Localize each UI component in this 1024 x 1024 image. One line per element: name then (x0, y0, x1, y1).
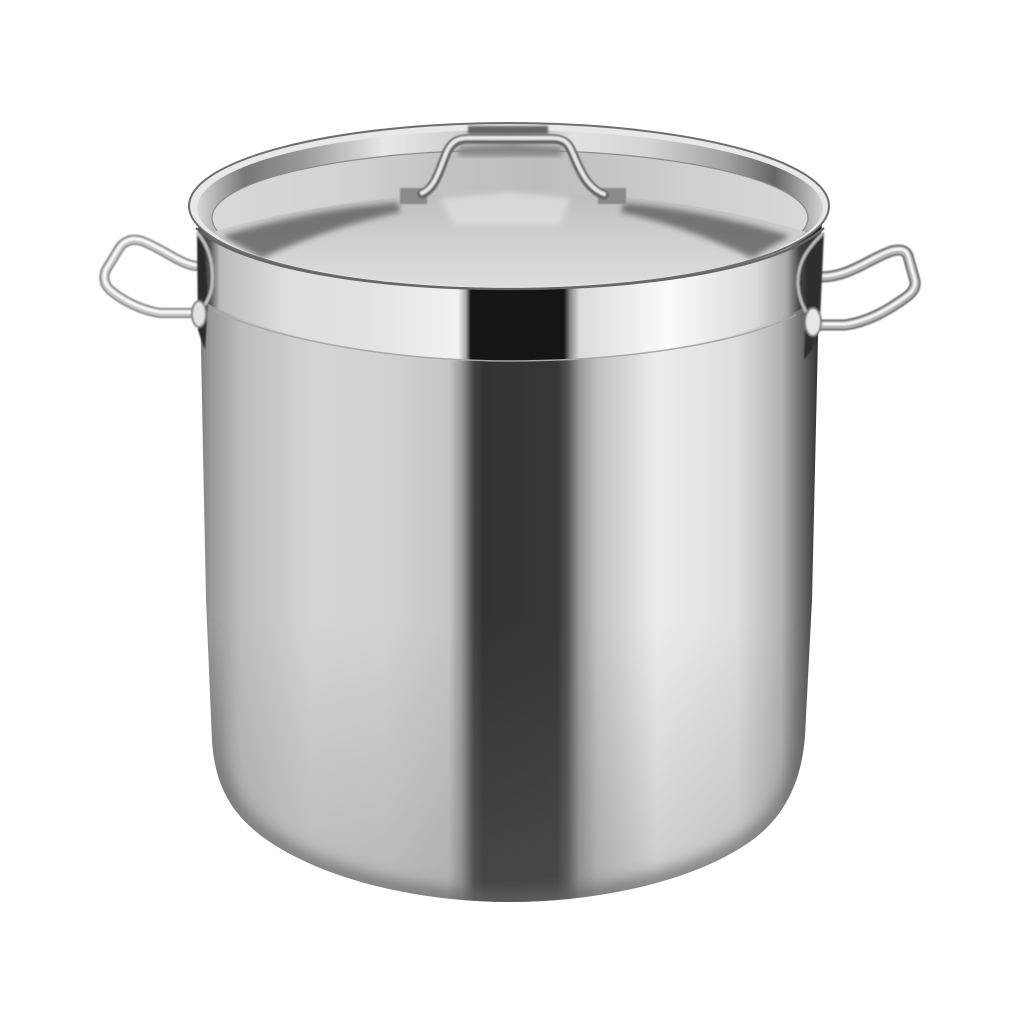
handle under-reflection (458, 146, 562, 156)
illustration: stainless steel stock pot (98, 122, 922, 902)
left handle (104, 239, 198, 313)
lid dome (214, 192, 806, 287)
lid handle (400, 138, 626, 204)
lid inner wall (197, 130, 823, 286)
lid front edge (196, 228, 824, 289)
dark crescent left (222, 203, 400, 258)
dark crescent right (620, 203, 790, 258)
left foot (400, 188, 427, 204)
right handle (818, 249, 915, 325)
lid outer rim (189, 123, 829, 289)
right foot (598, 188, 626, 204)
upper reflective band (198, 220, 822, 362)
pot body (200, 304, 818, 902)
left handle bracket (192, 232, 212, 350)
lid (189, 123, 829, 289)
lid centre reflection (440, 192, 570, 226)
lid top disc (212, 150, 808, 286)
right handle bracket (798, 232, 824, 360)
lid wall top reflection (468, 126, 548, 134)
